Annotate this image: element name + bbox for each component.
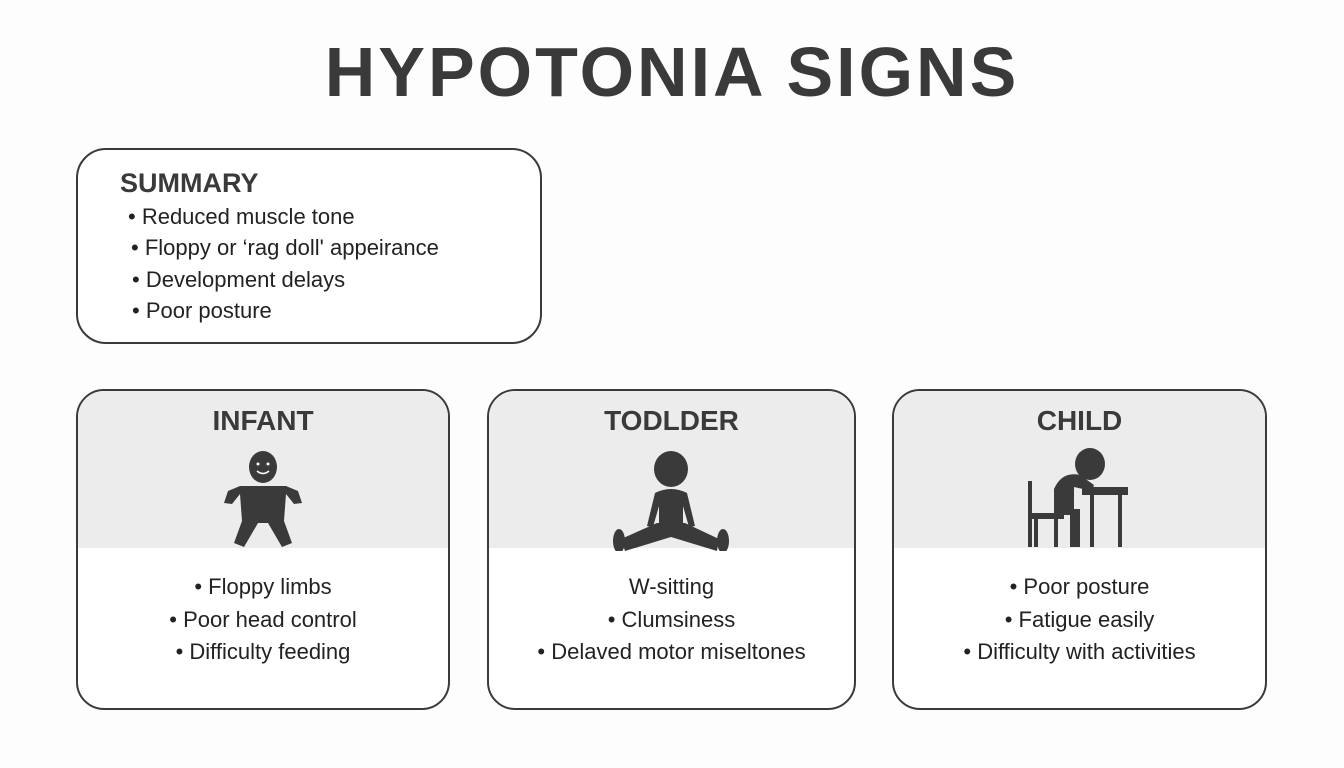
child heading: CHILD [1037, 405, 1122, 436]
icon: toddler sitting [613, 451, 729, 551]
child bullets [963, 574, 1196, 664]
infant heading: INFANT [212, 405, 314, 436]
toddler bullets [537, 574, 806, 664]
panel: summary [76, 148, 542, 344]
panel: infant [76, 389, 450, 710]
toddler bullets: W-sitting [629, 574, 714, 599]
child bullets: • Difficulty with activities [963, 639, 1196, 664]
infant bullets: • Difficulty feeding [176, 639, 350, 664]
panel: summary: • Floppy or ‘rag doll' appeirance [131, 235, 439, 260]
child bullets: • Poor posture [1010, 574, 1149, 599]
panel: summary: • Reduced muscle tone [128, 204, 355, 229]
infant bullets [169, 574, 357, 664]
icon: infant [224, 451, 302, 547]
summary heading: SUMMARY [120, 168, 258, 198]
child bullets: • Fatigue easily [1005, 606, 1154, 632]
toddler heading: TODLDER [604, 405, 739, 436]
panel: summary: • Poor posture [132, 298, 272, 323]
infant bullets: • Floppy limbs [194, 574, 332, 599]
toddler bullets: • Delaved motor miseltones [537, 639, 806, 664]
toddler bullets: • Clumsiness [608, 606, 735, 632]
panel: child [892, 389, 1267, 710]
summary bullets [128, 204, 439, 323]
title: HYPOTONIA SIGNS [325, 33, 1019, 111]
panel: summary: • Development delays [132, 267, 345, 292]
panel: toddler [487, 389, 856, 710]
infant bullets: • Poor head control [169, 606, 357, 632]
icon: child slumped at desk [1028, 448, 1128, 547]
